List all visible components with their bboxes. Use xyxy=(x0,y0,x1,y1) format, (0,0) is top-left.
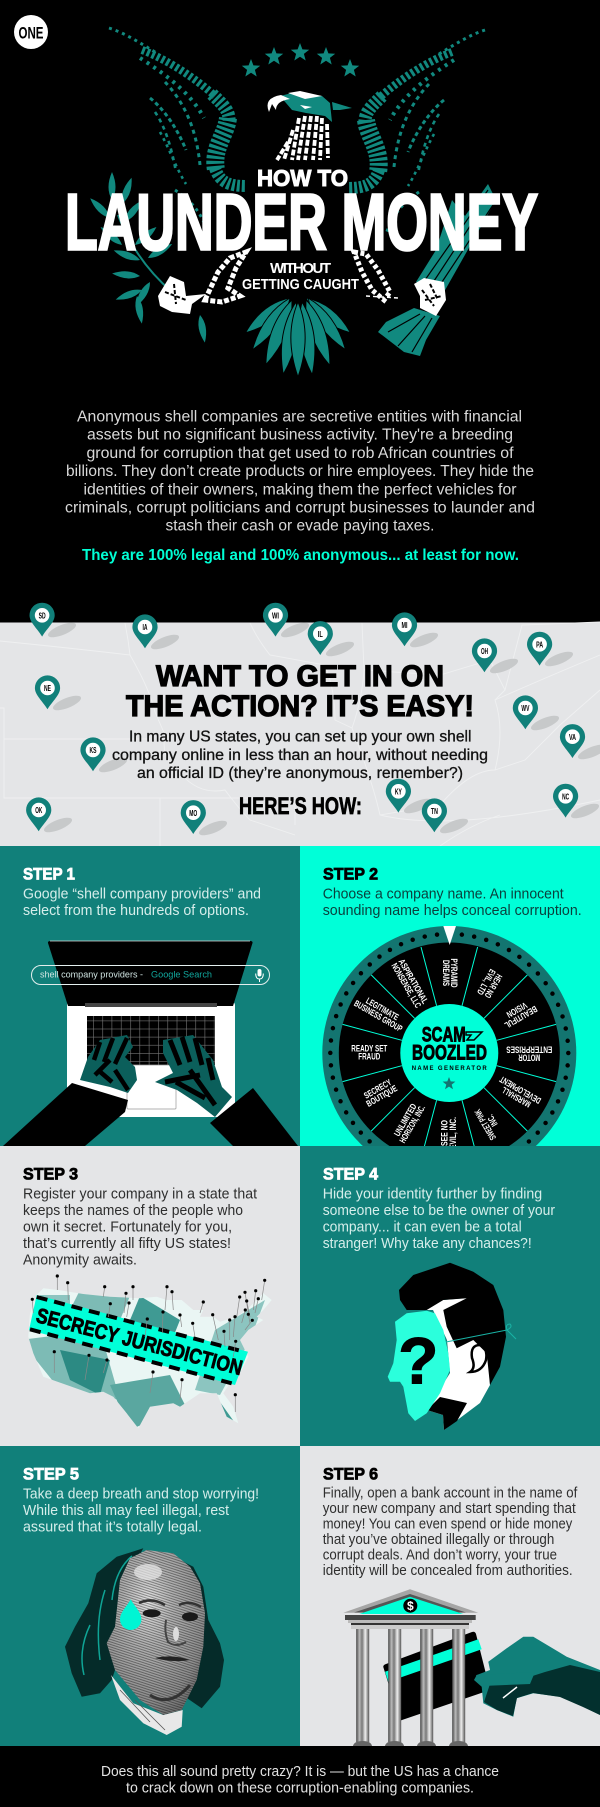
step 1 text: Google “shell company providers” and xyxy=(23,886,261,903)
title: HOW TO xyxy=(257,165,348,191)
eagle illustration xyxy=(88,28,496,377)
step 6 text: money! You can even spend or hide money xyxy=(323,1516,573,1532)
hero panel xyxy=(14,15,538,564)
title: GETTING CAUGHT xyxy=(242,276,359,293)
step 4 text: someone else to be the owner of your xyxy=(323,1202,555,1219)
pin IA xyxy=(132,614,181,652)
pin MO xyxy=(181,800,229,838)
microphone icon xyxy=(256,969,263,982)
step 1 heading: STEP 1 xyxy=(23,864,75,883)
search bar xyxy=(32,966,270,984)
step 3 text: that’s currently all fifty US states! xyxy=(23,1235,231,1252)
step 3 text: Register your company in a state that xyxy=(23,1186,258,1203)
wheel labels: ENTERPRISES xyxy=(506,1044,552,1054)
pin PA: PA xyxy=(536,640,543,650)
here's how label: HERE’S HOW: xyxy=(239,793,362,820)
step 4 text: Hide your identity further by finding xyxy=(323,1186,542,1203)
wheel centre logo xyxy=(400,1004,498,1102)
wheel labels: SEE NO xyxy=(440,1120,450,1146)
wheel labels: MARSHALL xyxy=(500,1085,533,1109)
pin KY xyxy=(386,779,434,816)
wheel pointer xyxy=(443,926,456,945)
step 4 text xyxy=(323,1186,555,1252)
state boundary lines xyxy=(0,622,600,846)
wheel labels: LEGITIMATE xyxy=(364,996,400,1022)
pin MO: MO xyxy=(189,809,197,818)
hands on keyboard xyxy=(3,1035,298,1146)
face xyxy=(107,1550,205,1715)
facial features xyxy=(134,1564,201,1700)
columns xyxy=(356,1629,369,1742)
wheel spokes xyxy=(343,947,556,1159)
pin WV xyxy=(513,695,561,733)
pin MI: MI xyxy=(402,621,408,630)
wheel labels: PYRAMID xyxy=(449,958,459,988)
mask string xyxy=(446,1324,516,1342)
wheel labels: READY SET xyxy=(351,1043,388,1053)
wheel labels: BUSINESS GROUP xyxy=(352,998,404,1034)
pin NE: NE xyxy=(44,684,51,693)
pin VA xyxy=(560,724,600,762)
wheel labels: MOTOR xyxy=(518,1053,540,1063)
wheel labels: FRAUD xyxy=(358,1052,381,1062)
title: WITHOUT xyxy=(270,260,331,277)
step 3 text: Anonymity awaits. xyxy=(23,1251,137,1268)
olive branch xyxy=(88,172,208,343)
step 6 text xyxy=(323,1486,578,1579)
pin MI xyxy=(392,612,440,650)
pin WV: WV xyxy=(521,704,530,713)
section heading: THE ACTION? IT’S EASY! xyxy=(126,690,474,723)
section intro text: In many US states, you can set up your own shell xyxy=(129,729,472,746)
intro paragraph: Anonymous shell companies are secretive entities with financial xyxy=(77,408,522,426)
step 2 text: sounding name helps conceal corruption. xyxy=(323,902,582,919)
section intro text: company online in less than an hour, without needing xyxy=(112,747,488,764)
step 3 text xyxy=(23,1186,258,1268)
pin NC xyxy=(553,784,600,821)
wheel labels: NONSENSE, LLC xyxy=(389,961,423,1010)
wheel labels: ASPIRATIONAL xyxy=(397,957,430,1006)
laptop xyxy=(48,941,253,1117)
eagle head xyxy=(268,91,352,160)
bank building xyxy=(343,1589,478,1746)
pin OH: OH xyxy=(481,647,488,656)
wheel labels xyxy=(351,957,552,1149)
section heading: WANT TO GET IN ON xyxy=(156,660,444,693)
step 5 text: While this all may feel illegal, rest xyxy=(23,1502,230,1519)
wheel labels: DREAMS xyxy=(441,960,451,986)
pin WI: WI xyxy=(272,612,279,620)
intro paragraph: assets but no significant business activity. They're a breeding xyxy=(87,427,513,444)
step 6 text: identity will be concealed from authorities. xyxy=(323,1563,573,1579)
pin TN xyxy=(422,798,470,836)
right wing xyxy=(348,30,485,234)
step 5 text xyxy=(23,1486,259,1536)
ONE logo: ONE xyxy=(18,24,44,42)
wheel labels: INC. xyxy=(485,1113,500,1128)
highlight line: They are 100% legal and 100% anonymous... at least for now. xyxy=(82,547,519,564)
wheel labels: HORIZON, INC. xyxy=(398,1103,427,1145)
section intro text xyxy=(112,729,488,782)
step 2 text: Choose a company name. An innocent xyxy=(323,886,564,903)
wheel centre logo: NAME GENERATOR xyxy=(412,1066,487,1072)
ONE logo xyxy=(14,15,48,49)
search bar: shell company providers - xyxy=(40,970,143,980)
pin IA: IA xyxy=(142,623,148,632)
intro paragraph xyxy=(65,408,535,535)
step 6 text: Finally, open a bank account in the name of xyxy=(323,1486,578,1502)
footer text: Does this all sound pretty crazy? It is — but the US has a chance xyxy=(101,1763,499,1780)
pin NC: NC xyxy=(562,792,569,802)
pin KS: KS xyxy=(90,746,97,755)
title xyxy=(65,165,538,293)
left wing xyxy=(109,28,246,232)
panel: map section xyxy=(0,603,600,846)
pin OK xyxy=(26,797,74,835)
step 3 text: keeps the names of the people who xyxy=(23,1202,243,1219)
pin NE xyxy=(35,675,83,713)
step 5 heading: STEP 5 xyxy=(23,1464,79,1483)
pin OH xyxy=(472,638,520,676)
arrows bundle xyxy=(378,184,496,356)
step 6 heading: STEP 6 xyxy=(323,1464,378,1483)
panel: step 4 xyxy=(300,1146,600,1446)
wheel centre logo: BOOZLED xyxy=(412,1041,487,1064)
talons and legs xyxy=(158,252,446,316)
intro paragraph: stash their cash or evade paying taxes. xyxy=(166,518,434,535)
US money map xyxy=(20,1276,280,1435)
step 4 text: company... it can even be a total xyxy=(323,1218,522,1236)
pin IL: IL xyxy=(318,630,323,639)
pin KS xyxy=(80,737,129,775)
pin KY: KY xyxy=(395,788,402,796)
footer text: to crack down on these corruption-enabling companies. xyxy=(126,1780,474,1797)
map pins xyxy=(32,1276,265,1412)
step 3 text: own it secret. Fortunately for you, xyxy=(23,1218,232,1236)
section intro text: an official ID (they’re anonymous, remember?) xyxy=(137,765,463,782)
panel: step 5 xyxy=(0,1446,300,1746)
wheel labels: EVIL, INC. xyxy=(448,1117,458,1149)
sweat drop xyxy=(120,1599,141,1630)
step 1 text: select from the hundreds of options. xyxy=(23,902,249,919)
hand holding card xyxy=(474,1637,600,1717)
wheel labels: UNLIMITED xyxy=(392,1102,419,1138)
panel: step 3 xyxy=(0,1146,300,1446)
step 4 text: stranger! Why take any chances?! xyxy=(323,1235,532,1252)
map pins xyxy=(26,603,600,838)
step 6 text: your new company and start spending that xyxy=(323,1501,576,1517)
intro paragraph: billions. They don’t create products or hire employees. They hide the xyxy=(66,463,534,480)
intro paragraph: identities of their owners, making them the perfect vehicles for xyxy=(84,481,516,498)
footer text xyxy=(101,1763,499,1797)
hair xyxy=(65,1548,143,1697)
pin OK: OK xyxy=(35,806,42,815)
pin TN: TN xyxy=(431,807,438,816)
wheel labels: SWEET PINK xyxy=(472,1107,498,1142)
stars xyxy=(242,43,359,76)
mask xyxy=(388,1311,450,1421)
wheel labels: SECRECY xyxy=(362,1077,393,1101)
step 5 text: Take a deep breath and stop worrying! xyxy=(23,1486,259,1503)
section heading xyxy=(126,660,474,723)
wheel labels: BEAUTIFUL xyxy=(503,1004,539,1031)
pin PA xyxy=(527,632,575,669)
step 3 heading: STEP 3 xyxy=(23,1164,78,1183)
panel: step 6 xyxy=(300,1446,600,1746)
wheel labels: VISION xyxy=(505,1000,529,1020)
step 2 text xyxy=(323,886,582,919)
question mark: ? xyxy=(398,1323,438,1397)
step 5 text: assured that it’s totally legal. xyxy=(23,1518,202,1536)
step 2 heading: STEP 2 xyxy=(323,864,378,883)
Franklin portrait xyxy=(65,1548,224,1735)
wheel labels: HEAR NO xyxy=(483,972,504,1000)
caution tape: SECRECY JURISDICTION xyxy=(34,1304,245,1380)
tail feathers xyxy=(242,293,354,377)
intro paragraph: criminals, corrupt politicians and corrupt businesses to launder and xyxy=(65,500,535,516)
wheel labels: BOUTIQUE xyxy=(365,1083,399,1109)
pin WI xyxy=(263,603,311,640)
panel: step 2 xyxy=(300,846,600,1146)
step 6 text: corrupt deals. And don’t worry, your true xyxy=(323,1547,557,1563)
credit card xyxy=(383,1632,490,1720)
pin IL xyxy=(308,621,356,659)
wheel labels: EVIL, LTD xyxy=(475,967,498,997)
wheel labels: DEVELOPMENT xyxy=(498,1074,543,1106)
bank building: $ xyxy=(407,1599,414,1613)
step 4 heading: STEP 4 xyxy=(323,1164,379,1183)
collar xyxy=(111,1675,183,1735)
spinning name wheel xyxy=(322,926,576,1146)
pin SD: SD xyxy=(39,612,46,620)
panel: step 1 xyxy=(0,846,300,1146)
pin SD xyxy=(29,603,78,640)
step 6 text: that you’ve obtained illegally or through xyxy=(323,1532,554,1548)
wheel centre logo: SCAM xyxy=(422,1024,466,1047)
step 1 text xyxy=(23,886,261,919)
intro paragraph: ground for corruption that get used to rob African countries of xyxy=(86,445,514,462)
search bar: Google Search xyxy=(151,970,212,980)
pin VA: VA xyxy=(569,733,576,742)
anonymous head with mask xyxy=(388,1263,516,1430)
